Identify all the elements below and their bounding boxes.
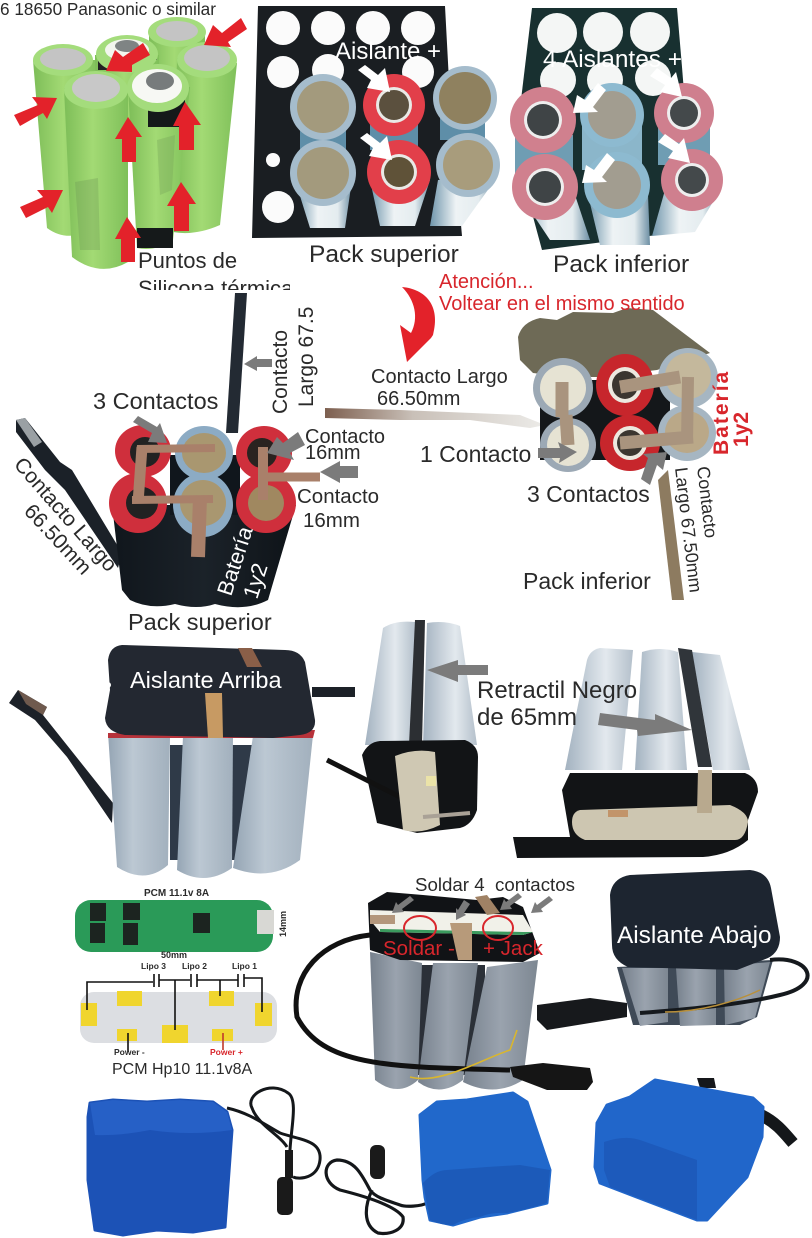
label: aislante abajo: Aislante Abajo [617, 922, 772, 949]
panel: pack with PCM and jack cable [296, 892, 593, 1090]
diagram: PCM wiring: Lipo 2 [182, 961, 207, 971]
diagram: PCM wiring: Lipo 1 [232, 961, 257, 971]
panel: side pack with black shrink tube [327, 620, 478, 833]
heading: PCM 11.1v 8A: PCM 11.1v 8A [144, 888, 209, 899]
label: contacto largo 66.50 right: Contacto Largo [371, 366, 508, 388]
label: contacto largo 66.50 left: Contacto Largo [9, 453, 121, 576]
panel: top pack holder [252, 6, 500, 238]
diagram: PCM wiring: Power + [210, 1047, 243, 1057]
label: retractil negro [477, 677, 637, 731]
label: 50mm: 50mm [161, 950, 187, 960]
strip: long contact right [325, 408, 545, 428]
label: solder and jack: + Jack [483, 937, 544, 960]
label: contacto 16mm b [297, 485, 379, 532]
label: 4 aislantes +: 4 Aislantes + [543, 46, 682, 73]
label: pack inferior bottom: Pack inferior [523, 568, 651, 594]
label: PCM Hp10: PCM Hp10 11.1v8A [112, 1061, 253, 1078]
panel: bottom pack holder [510, 8, 723, 250]
callout: attention: Atención... [439, 271, 534, 293]
icon: red circles on solder points [404, 916, 513, 940]
label: contacto 16mm a: Contacto [305, 426, 385, 448]
panel: pack with bottom insulator [537, 870, 808, 1030]
label: contacto 16mm a: 16mm [305, 442, 361, 464]
label: bateria 1y2 right [710, 370, 753, 455]
label: 3 contactos right: 3 Contactos [527, 481, 650, 507]
label: bateria 1y2 left: 1y2 [238, 560, 273, 602]
label: pack inferior top: Pack inferior [553, 251, 689, 278]
label: contacto 16mm a [305, 426, 385, 464]
label: contacto 16mm b: 16mm [303, 509, 360, 532]
icon: grey arrows on upper pack [133, 416, 358, 483]
label: contacto largo 67.50: Contacto [693, 465, 721, 539]
label: solder and jack [383, 937, 544, 960]
label: contacto largo 67.5: Contacto [269, 330, 292, 414]
panel: upper pack assembled [16, 293, 320, 607]
label: contacto 16mm b: Contacto [297, 485, 379, 508]
diagram: PCM wiring [80, 961, 277, 1057]
strip: long contact down [658, 470, 684, 600]
panel: blue pack right [595, 1078, 793, 1220]
panel: rear pack with shrink tube [513, 648, 758, 858]
panel: green PCM board [75, 900, 274, 952]
label: retractil negro: de 65mm [477, 704, 577, 731]
label: contacto largo 66.50 left: 66.50mm [19, 500, 96, 579]
text: silicone points [140, 252, 290, 290]
icon: red arrows on green cells [14, 18, 247, 262]
label: aislante arriba: Aislante Arriba [130, 667, 282, 693]
panel: pack with top insulator [9, 645, 355, 878]
icon: grey arrow on rear pack [598, 713, 692, 736]
callout: attention: Voltear en el mismo sentido [439, 293, 685, 315]
icon: grey arrows on lower pack [538, 442, 667, 485]
label: bateria 1y2 right: 1y2 [730, 412, 753, 447]
diagram: PCM wiring: Lipo 3 [141, 961, 166, 971]
panel: lower pack assembled [518, 308, 718, 472]
icon: grey arrow to shrink tube [427, 660, 488, 682]
label: 14mm: 14mm [278, 911, 288, 937]
panel: blue pack left [88, 1088, 320, 1235]
label: contacto largo 67.50: Largo 67.50mm [671, 466, 706, 594]
label: contacto largo 66.50 right [371, 366, 508, 410]
label: 1 contacto: 1 Contacto [420, 441, 531, 467]
text: silicone points: Silicona térmica [138, 276, 294, 301]
diagram: PCM wiring: Power - [114, 1047, 145, 1057]
icon: grey arrow to long contact [244, 356, 272, 371]
label: pack superior: Pack superior [309, 241, 459, 268]
label: contacto largo 67.50 [671, 465, 721, 594]
label: retractil negro: Retractil Negro [477, 677, 637, 704]
text: silicone points: Puntos de [138, 248, 237, 273]
callout: attention [439, 271, 685, 315]
label: 3 contactos left: 3 Contactos [93, 388, 218, 414]
label: contacto largo 67.5 [269, 307, 318, 414]
label: aislante +: Aislante + [335, 38, 441, 65]
label: bateria 1y2 right: Batería [710, 370, 733, 455]
panel: blue pack middle [326, 1093, 550, 1233]
label: contacto largo 67.5: Largo 67.5 [295, 307, 318, 407]
panel: six green 18650 cells [33, 17, 237, 269]
label: soldar 4 contactos: Soldar 4 contactos [415, 874, 575, 895]
label: pack superior bottom: Pack superior [128, 609, 272, 635]
label: contacto largo 66.50 right: 66.50mm [377, 388, 460, 410]
arrow: red flip arrow [400, 287, 435, 362]
icon: grey arrows to contacts [392, 893, 553, 920]
label: solder and jack: Soldar - [383, 937, 455, 960]
label: bateria 1y2 left: Batería [212, 523, 258, 599]
